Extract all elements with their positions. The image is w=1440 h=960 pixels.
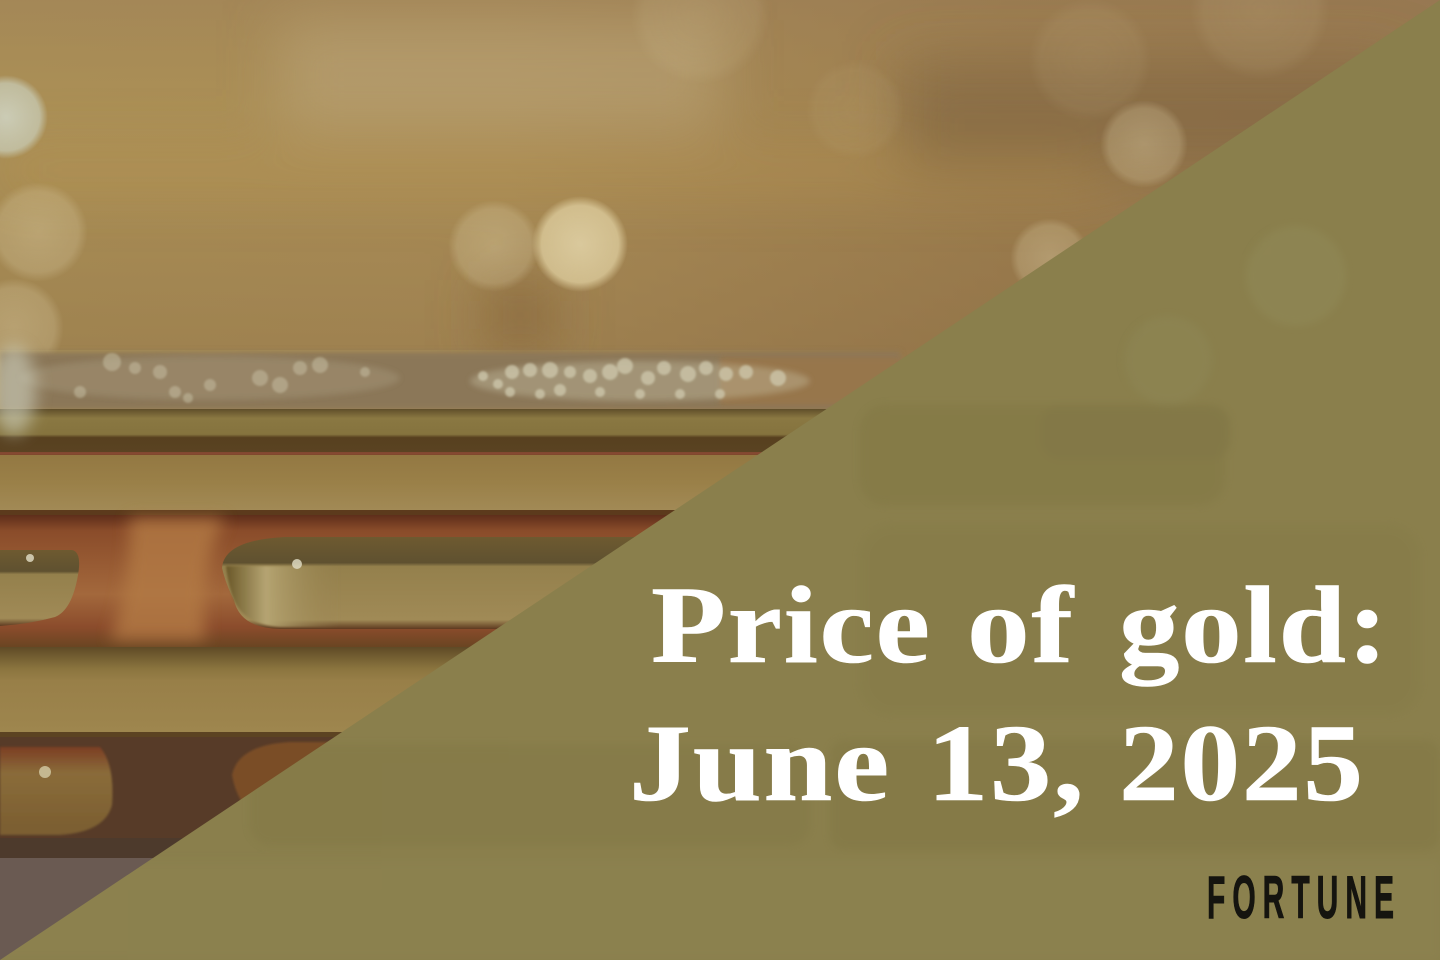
gold:: gold: <box>1119 564 1389 686</box>
middle bar left <box>0 550 79 626</box>
Price: Price <box>651 564 932 686</box>
top bar rim <box>0 409 900 455</box>
granular stamped texture on bar top <box>20 353 810 403</box>
headline <box>629 564 1389 824</box>
logo: FORTUNE: FORTUNE <box>1207 864 1401 931</box>
bar highlights <box>0 345 900 778</box>
middle bar right <box>222 537 800 629</box>
top bar surface <box>0 352 900 410</box>
faint ghost of photo inside panel <box>0 226 1440 960</box>
bokeh lights <box>0 0 1330 378</box>
lower bar <box>0 647 740 732</box>
copper reflection gap <box>0 515 800 647</box>
bottom gap and nubs <box>0 737 560 840</box>
2025: 2025 <box>1119 702 1365 824</box>
table surface <box>0 858 320 960</box>
of: of <box>967 564 1075 686</box>
gold bars stack <box>0 352 900 960</box>
top bar face <box>0 455 900 511</box>
13,: 13, <box>927 702 1085 824</box>
June: June <box>629 702 891 824</box>
